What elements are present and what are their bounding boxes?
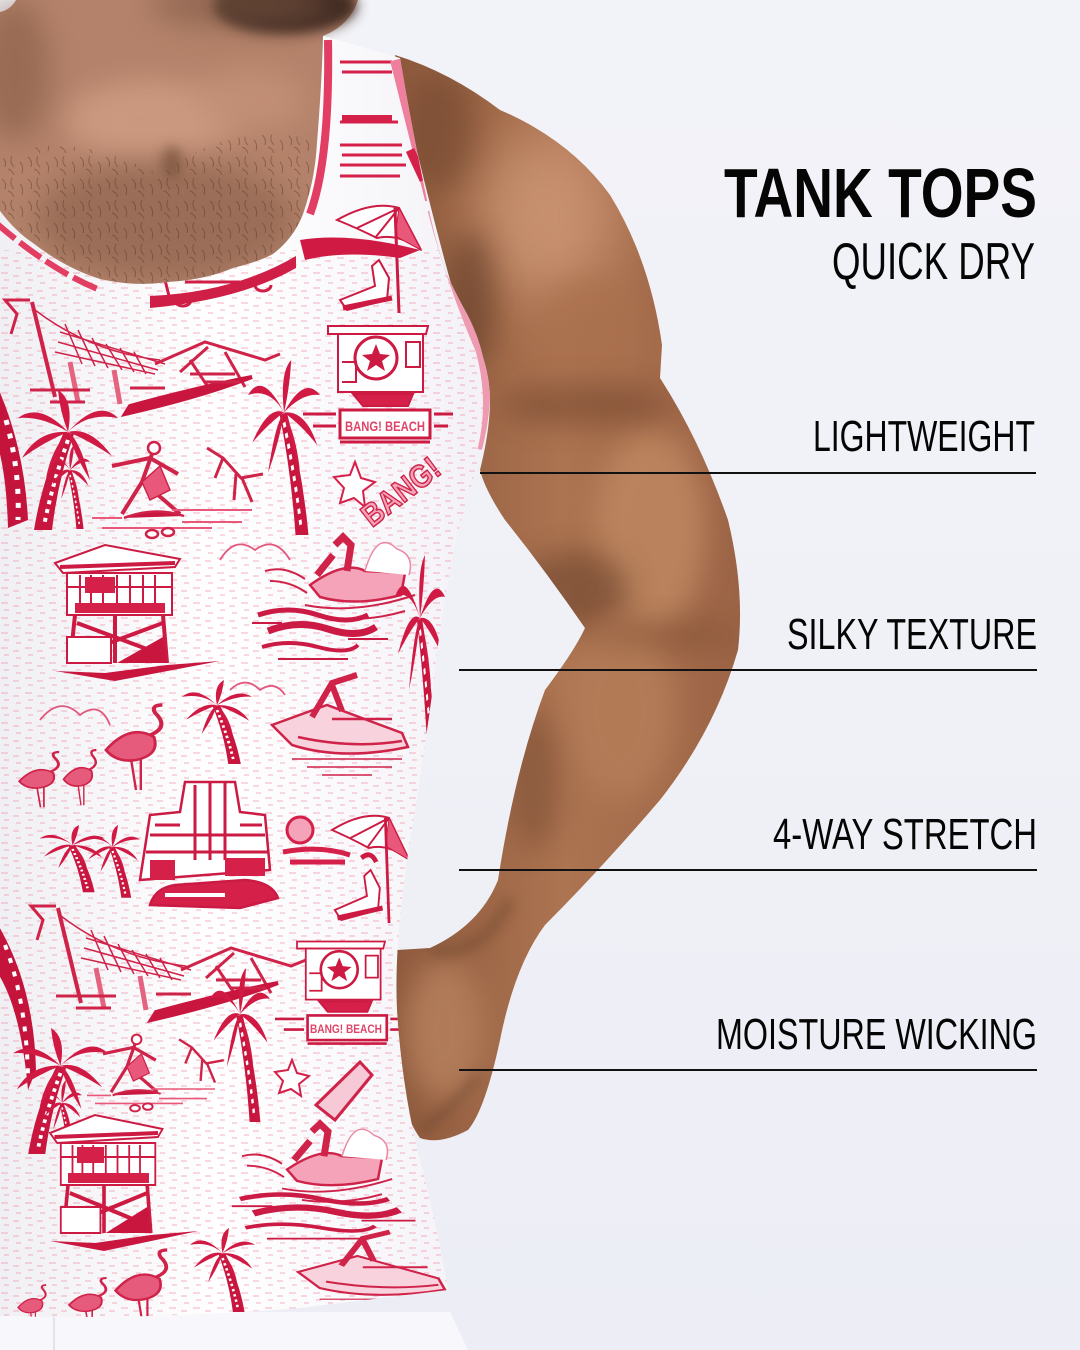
armhole trim [432, 210, 488, 450]
palm small [182, 680, 252, 764]
palms near hotel [40, 825, 105, 892]
tower lower left [50, 1115, 198, 1251]
flamingos small [19, 752, 59, 807]
tank top with toile print [0, 36, 500, 1330]
jet ski upper [265, 537, 415, 619]
red sand band [300, 238, 420, 260]
waves mid [252, 610, 388, 659]
bang sign lower [316, 1062, 372, 1120]
jet ski lower [242, 1124, 392, 1202]
palm bottom [190, 1228, 255, 1312]
white shorts [0, 1312, 468, 1350]
strap print [340, 60, 430, 200]
tower lower right [275, 942, 407, 1044]
runner and dog lower [87, 1035, 224, 1111]
flamingo large [106, 705, 162, 790]
boat bottom [298, 1232, 445, 1312]
net upper [5, 300, 280, 414]
tower mid [55, 545, 220, 681]
trunk left [0, 392, 28, 528]
small palm lower left [42, 1080, 82, 1130]
red car band [150, 256, 296, 308]
star lower [275, 1060, 309, 1096]
umbrella lower [332, 816, 409, 923]
boat mid [272, 675, 408, 775]
model arm [389, 55, 740, 1140]
flamingo bottom [116, 1250, 167, 1326]
model torso and neck skin [0, 0, 358, 300]
sun [287, 817, 313, 843]
runner and dog upper [92, 442, 263, 538]
sand dash texture [0, 250, 500, 1330]
beach sign text upper: BANG! BEACH [345, 418, 425, 434]
palm lower left [13, 1028, 108, 1154]
hotel [140, 782, 278, 908]
palm right [396, 555, 445, 734]
star [334, 462, 375, 507]
clouds mid [40, 544, 290, 725]
palm tree lower [210, 968, 270, 1122]
waves lower [232, 1194, 416, 1239]
net lower [31, 906, 306, 1020]
palm upper centre [248, 360, 320, 535]
tower upper right [303, 326, 453, 442]
palm left [18, 390, 118, 530]
umbrella upper [337, 206, 421, 313]
small palm left [50, 445, 90, 529]
BANG sign: BANG! [354, 450, 447, 534]
neckline trim print [0, 222, 100, 290]
trunk lower left [0, 915, 36, 1090]
beach sign text lower: BANG! BEACH [310, 1022, 382, 1036]
